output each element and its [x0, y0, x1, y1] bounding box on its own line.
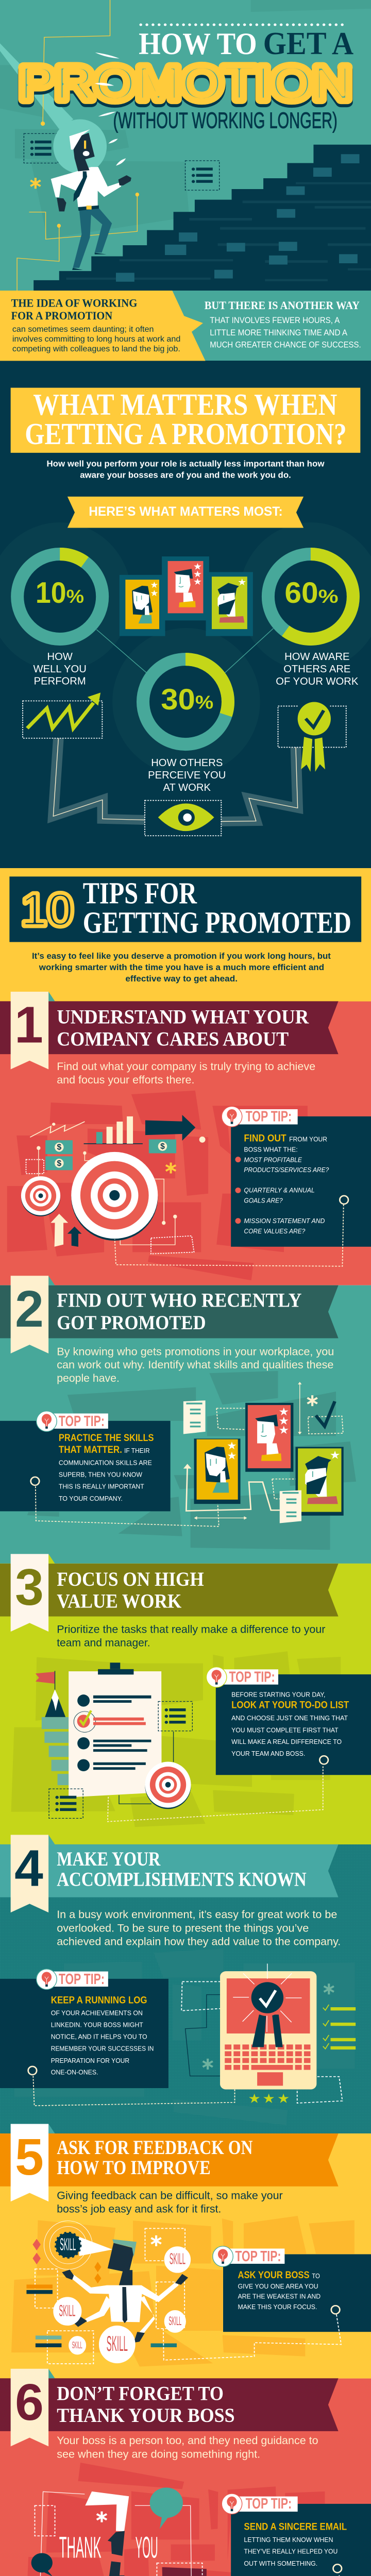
tip box 4: PREPARATION FOR YOUR — [51, 2057, 129, 2064]
body text: tip 1: Find out what your company is truly trying to achieve — [57, 1061, 315, 1073]
icon: rising graph — [23, 692, 102, 738]
body text: tip 3: team and manager. — [57, 1637, 150, 1649]
top tip badge 4: TOP TIP: — [59, 1971, 105, 1988]
connector lines — [53, 738, 298, 821]
donut: 30 percent: 30 — [161, 683, 195, 716]
banner: tip 2 title: 2 — [15, 1280, 44, 1338]
tip box 1 — [231, 1116, 371, 1247]
tip box 5: ASK YOUR BOSS — [238, 2270, 310, 2281]
top tip badge 3: TOP TIP: — [229, 1669, 275, 1686]
heading: how to get a: GET A — [263, 25, 353, 61]
tip box 2: TO YOUR COMPANY. — [59, 1495, 123, 1502]
icon: eye — [145, 801, 221, 836]
illustration: targets and chart: $ — [57, 1143, 61, 1152]
body text: tip 3: Prioritize the tasks that really make a difference to your — [57, 1624, 325, 1636]
tip box 4: OF YOUR ACHIEVEMENTS ON — [51, 2009, 143, 2017]
tip box 1: FROM YOUR — [289, 1136, 327, 1143]
tip box 3: AND CHOOSE JUST ONE THING THAT — [231, 1714, 348, 1722]
tip box 3: YOUR TEAM AND BOSS. — [231, 1750, 305, 1757]
banner: tip 1 title: UNDERSTAND WHAT YOUR — [57, 1006, 309, 1028]
panel: intro left: competing with colleagues to land the big job. — [12, 345, 180, 353]
icon: asterisk — [30, 178, 41, 189]
illustration: juggling skills: SKILL — [59, 2301, 75, 2319]
tip box 6: OUT WITH SOMETHING. — [244, 2560, 317, 2567]
tip box 5: GIVE YOU ONE AREA YOU — [238, 2282, 318, 2290]
tip box 5: ARE THE WEAKEST IN AND — [238, 2293, 321, 2300]
panel: intro right: THAT INVOLVES FEWER HOURS, A — [210, 315, 340, 325]
body text: tip 1: and focus your efforts there. — [57, 1074, 194, 1086]
tip box 2: PRACTICE THE SKILLS — [59, 1433, 154, 1444]
panel: intro left: FOR A PROMOTION — [11, 309, 112, 322]
banner: tip 3 title — [0, 1554, 339, 1632]
label: how aware others are: OTHERS ARE — [283, 664, 350, 675]
tip box 1: MISSION STATEMENT AND — [244, 1217, 325, 1225]
illustration: juggling skills: SKILL — [60, 2235, 76, 2254]
panel: tip 4 — [0, 1835, 356, 2125]
donut: 60 percent — [268, 554, 353, 639]
body text: tip 5: boss’s job easy and ask for it first. — [57, 2204, 221, 2215]
panel: intro right: LITTLE MORE THINKING TIME AND A — [210, 328, 347, 337]
tip box 2: SUPERB, THEN YOU KNOW — [59, 1470, 142, 1478]
body text: tip 4: In a busy work environment, it’s easy for great work to be — [57, 1909, 337, 1921]
icon: rosette — [278, 702, 346, 772]
intro text: tips: It’s easy to feel like you deserve a promotion if you work long hours, but — [32, 951, 331, 961]
tip box 5: MAKE THIS YOUR FOCUS. — [238, 2303, 317, 2311]
donut: 10 percent: 10 — [36, 577, 66, 609]
heading: promotion: PROMOTION — [19, 60, 351, 113]
illustration: targets and chart — [21, 1115, 206, 1254]
ribbon: here's what matters most: HERE’S WHAT MATTERS MOST: — [89, 505, 283, 519]
banner: tip 3 title: FOCUS ON HIGH — [57, 1568, 204, 1590]
panel: tip 6 — [0, 2369, 371, 2576]
banner: tip 1 title: COMPANY CARES ABOUT — [57, 1028, 289, 1050]
banner: tip 2 title: GOT PROMOTED — [57, 1312, 206, 1334]
illustration: juggling skills: SKILL — [168, 2314, 181, 2328]
top tip badge 5: TOP TIP: — [235, 2248, 281, 2265]
tip box 1: GOALS ARE? — [244, 1196, 283, 1204]
banner: tip 6 title — [0, 2369, 339, 2446]
heading: 10 tips — [9, 876, 361, 942]
panel: tip 1 — [0, 992, 371, 1280]
heading: what matters — [11, 387, 360, 453]
illustration: targets and chart: $ — [57, 1159, 61, 1168]
tip box 1: PRODUCTS/SERVICES ARE? — [244, 1166, 329, 1174]
label: how well you perform — [33, 651, 87, 687]
banner: tip 6 title: 6 — [15, 2374, 44, 2431]
illustration: thank you handshake: YOU — [136, 2531, 158, 2564]
illustration: to-do list — [36, 1663, 192, 1818]
intro text: tips: working smarter with the time you have is a much more efficient and — [39, 962, 324, 972]
label: how well you perform: PERFORM — [34, 675, 86, 687]
panel: what matters lower — [9, 659, 361, 984]
tip box 3: YOU MUST COMPLETE FIRST THAT — [231, 1726, 339, 1734]
heading: 10 tips: 10 — [21, 884, 73, 935]
panel: intro left: involves committing to long hours at work and — [12, 335, 180, 344]
panel: intro left: THE IDEA OF WORKING — [11, 297, 137, 310]
tip box 2: THIS IS REALLY IMPORTANT — [59, 1483, 144, 1490]
panel: intro right — [205, 299, 361, 350]
illustration: thank you handshake — [31, 2487, 207, 2576]
intro text: tips — [32, 951, 331, 984]
label: how aware others are — [276, 651, 359, 687]
donut: 30 percent — [143, 659, 228, 744]
tip box 5: TO — [312, 2272, 320, 2280]
banner: tip 5 title — [0, 2124, 339, 2201]
body text: tip 6 — [57, 2435, 318, 2460]
tip box 3 — [216, 1674, 371, 1775]
panel: hero — [0, 0, 371, 361]
tip box 4 — [0, 1979, 168, 2088]
panel: intro left: can sometimes seem daunting; it often — [12, 325, 154, 334]
subheading text: aware your bosses are of you and the work you do. — [80, 470, 291, 480]
icon: checklist right — [185, 161, 220, 190]
tip box 1: CORE VALUES ARE? — [244, 1227, 306, 1235]
panel: what matters — [0, 387, 371, 775]
panel: tip 2 — [0, 1276, 356, 1550]
label: how well you perform: WELL YOU — [33, 664, 87, 675]
panel: tip 5 — [0, 2124, 371, 2366]
body text: tip 5 — [57, 2190, 283, 2215]
heading: 10 tips: TIPS FOR — [83, 876, 197, 910]
tip box 5 — [223, 2254, 371, 2332]
panel: intro left — [0, 291, 206, 361]
illustration: juggling skills — [26, 2221, 190, 2364]
top tip badge 1 — [222, 1107, 298, 1127]
body text: tip 4: overlooked. To be sure to present the things you’ve — [57, 1923, 309, 1935]
tip box 2: IF THEIR — [124, 1447, 150, 1454]
heading: how to get a: HOW TO — [139, 27, 257, 61]
body text: tip 6: see when they are doing something right. — [57, 2448, 260, 2460]
tip box 3: BEFORE STARTING YOUR DAY, — [231, 1691, 325, 1699]
illustration: juggling skills: SKILL — [72, 2340, 82, 2350]
tip box 4: ONE-ON-ONES. — [51, 2069, 98, 2076]
tip box 4: REMEMBER YOUR SUCCESSES IN — [51, 2045, 154, 2053]
banner: tip 4 title — [0, 1835, 339, 1912]
body text: tip 5: Giving feedback can be difficult, so make your — [57, 2190, 283, 2202]
banner: tip 3 title: VALUE WORK — [57, 1590, 182, 1613]
tip box 6: SEND A SINCERE EMAIL — [244, 2521, 347, 2532]
tip box 3: LOOK AT YOUR TO-DO LIST — [231, 1700, 349, 1711]
ribbon: here's what matters most — [68, 497, 303, 528]
top tip badge 1: TOP TIP: — [246, 1109, 292, 1125]
panel: intro right: BUT THERE IS ANOTHER WAY — [205, 299, 360, 312]
top tip badge 2: TOP TIP: — [59, 1413, 105, 1430]
banner: tip 1 title — [0, 992, 339, 1070]
top tip badge 2 — [37, 1411, 108, 1431]
banner: tip 2 title: FIND OUT WHO RECENTLY — [57, 1289, 301, 1311]
top tip badge 3 — [206, 1667, 278, 1687]
donut: 10 percent — [18, 554, 103, 639]
tip box 2: THAT MATTER. — [59, 1445, 122, 1455]
panel: tip 3 — [0, 1554, 371, 1827]
top tip badge 6: TOP TIP: — [246, 2496, 292, 2512]
body text: tip 2: people have. — [57, 1372, 120, 1384]
banner: tip 5 title: HOW TO IMPROVE — [57, 2157, 211, 2179]
tip box 4: LINKEDIN. YOUR BOSS MIGHT — [51, 2021, 143, 2029]
illustration: thank you handshake: THANK — [59, 2531, 102, 2564]
banner: tip 3 title: 3 — [15, 1558, 44, 1616]
label: how others perceive you: AT WORK — [163, 782, 211, 793]
top tip badge 4 — [37, 1969, 108, 1990]
banner: tip 6 title: DON’T FORGET TO — [57, 2383, 224, 2405]
tip box 6: LETTING THEM KNOW WHEN — [244, 2536, 333, 2544]
tip box 2: COMMUNICATION SKILLS ARE — [59, 1459, 152, 1466]
body text: tip 4: achieved and explain how they add value to the company. — [57, 1936, 341, 1948]
heading: how to get a — [139, 25, 353, 61]
character: running man — [51, 120, 131, 270]
tip box 6 — [231, 2504, 371, 2576]
banner: tip 5 title: ASK FOR FEEDBACK ON — [57, 2137, 252, 2159]
tip box 3: WILL MAKE A REAL DIFFERENCE TO — [231, 1738, 342, 1745]
banner: tip 5 title: 5 — [15, 2128, 44, 2186]
donut: 60 percent: % — [318, 586, 339, 607]
illustration: laptop award — [181, 1963, 356, 2103]
label: how aware others are: HOW AWARE — [284, 651, 350, 663]
tip box 1: QUARTERLY & ANNUAL — [244, 1187, 315, 1194]
tip box 1: BOSS WHAT THE: — [244, 1146, 298, 1153]
banner: tip 1 title: 1 — [14, 996, 43, 1054]
donut: 10 percent: % — [66, 586, 84, 607]
tip box 1: FIND OUT — [244, 1133, 286, 1144]
illustration: promoted portraits — [183, 1382, 344, 1523]
label: how others perceive you: PERCEIVE YOU — [148, 770, 226, 781]
banner: tip 4 title: 4 — [14, 1839, 43, 1897]
tip box 4: KEEP A RUNNING LOG — [51, 1995, 147, 2006]
body text: tip 3 — [57, 1624, 325, 1649]
subheading text: How well you perform your role is actually less important than how — [46, 459, 325, 468]
illustration: juggling skills: SKILL — [107, 2332, 128, 2355]
panel: tip 5: SKILL — [170, 2250, 185, 2267]
tip box 4: NOTICE, AND IT HELPS YOU TO — [51, 2032, 147, 2040]
donut: 30 percent: % — [195, 692, 213, 713]
banner: tip 4 title: ACCOMPLISHMENTS KNOWN — [57, 1868, 307, 1890]
banner: tip 2 title — [0, 1276, 339, 1353]
banner: tip 4 title: MAKE YOUR — [57, 1848, 161, 1870]
donut: 60 percent: 60 — [284, 577, 318, 609]
body text: tip 2: can work out why. Identify what skills and qualities these — [57, 1359, 333, 1371]
tip box 1: MOST PROFITABLE — [244, 1156, 302, 1163]
heading: promotion: PROMOTION — [19, 57, 351, 110]
body text: tip 1 — [57, 1061, 315, 1086]
intro text: tips: effective way to get ahead. — [125, 974, 238, 984]
body text: tip 2 — [57, 1346, 334, 1384]
label: how others perceive you — [148, 757, 226, 793]
body text: tip 4 — [57, 1909, 341, 1948]
label: how aware others are: OF YOUR WORK — [276, 676, 359, 687]
top tip badge 5 — [213, 2246, 284, 2266]
tip box 6: THEY’VE REALLY HELPED YOU — [244, 2548, 338, 2555]
staircase — [33, 145, 371, 291]
illustration: targets and chart: $ — [160, 1142, 165, 1151]
banner: tip 6 title: THANK YOUR BOSS — [57, 2404, 235, 2427]
heading: 10 tips: 10 — [21, 884, 73, 935]
tip box 2 — [0, 1421, 171, 1511]
body text: tip 2: By knowing who gets promotions in your workplace, you — [57, 1346, 334, 1358]
heading: promotion: PROMOTION — [19, 57, 351, 110]
label: how well you perform: HOW — [47, 651, 73, 663]
body text: tip 6: Your boss is a person too, and they need guidance to — [57, 2435, 318, 2447]
icon: checklist left — [24, 133, 58, 163]
top tip badge 6 — [222, 2494, 298, 2514]
label: how others perceive you: HOW OTHERS — [151, 757, 223, 769]
portraits — [120, 556, 253, 636]
subheading text — [46, 459, 325, 480]
